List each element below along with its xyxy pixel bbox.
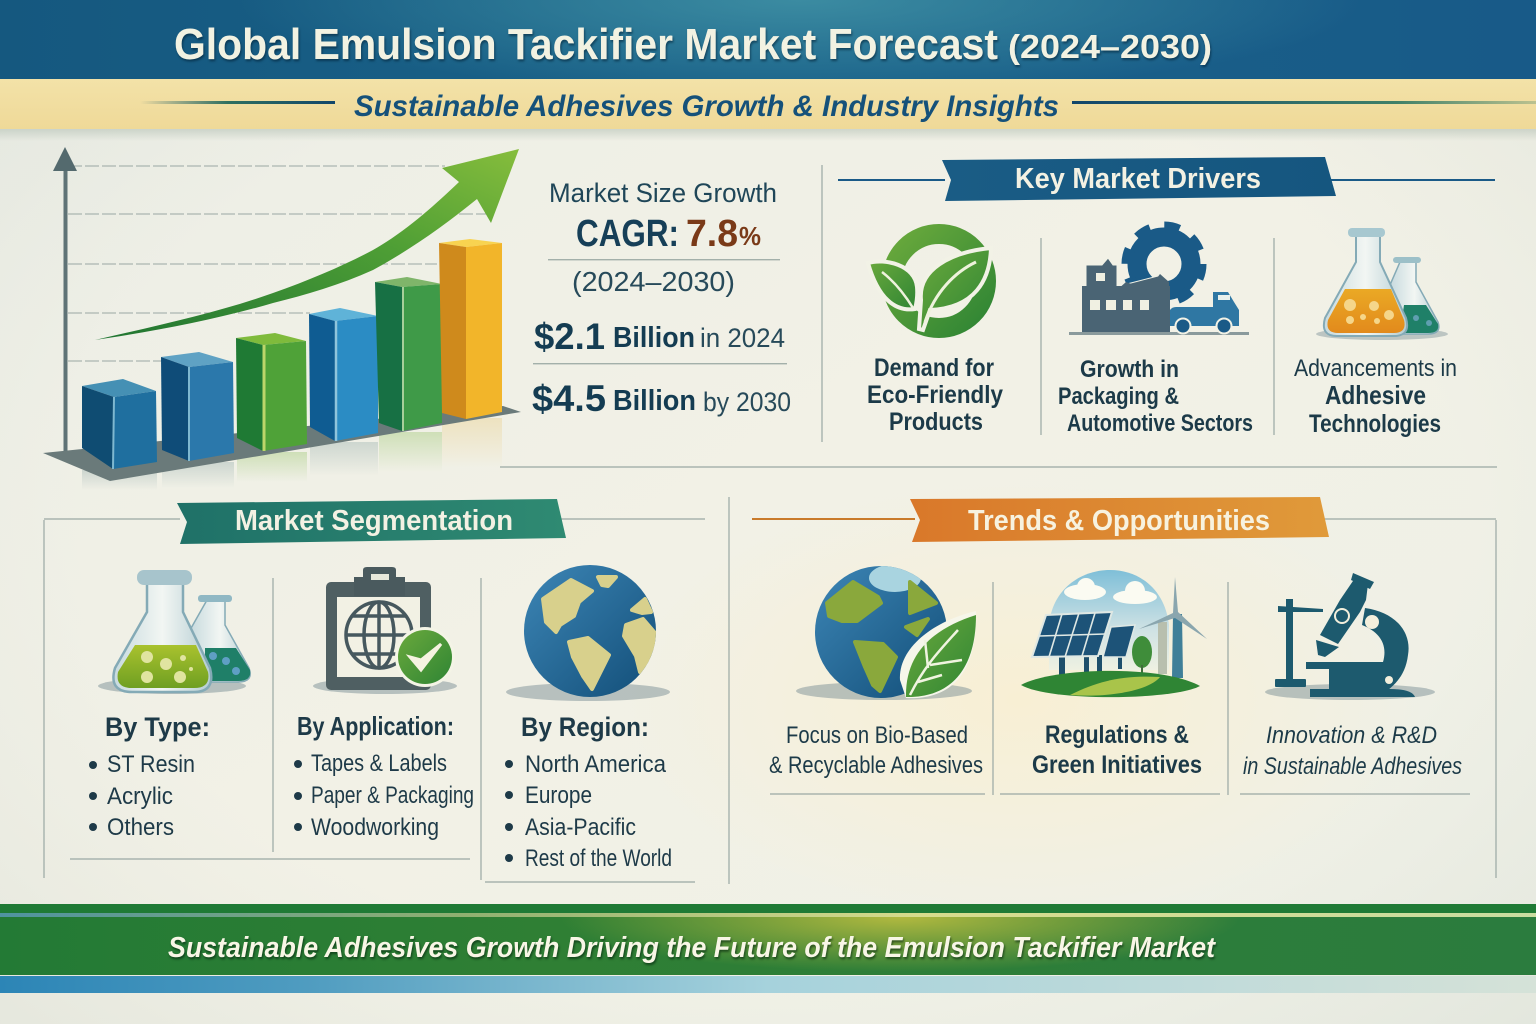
driver label 3: Adhesive [1325, 380, 1426, 410]
driver label 3 [1294, 355, 1457, 438]
by region list: Asia-Pacific [525, 814, 636, 841]
panel: market size stats: CAGR: [576, 213, 679, 255]
panel: market size stats: in 2024 [700, 323, 785, 353]
icon: factory, gear and truck [1069, 227, 1249, 335]
icon: leaves in circle [868, 234, 991, 330]
growth arrow [95, 149, 519, 340]
subtitle band: Sustainable Adhesives Growth & Industry Insights [354, 90, 1059, 123]
trend label 1 [769, 722, 983, 779]
icon: microscope [1265, 573, 1435, 700]
icon: globe [506, 565, 670, 701]
by region list: By Region: [521, 712, 649, 742]
by application list: By Application: [297, 711, 454, 741]
driver label 3: Technologies [1309, 410, 1441, 438]
heading: market segmentation [177, 499, 566, 544]
trend label 2: Regulations & [1045, 721, 1189, 749]
trend label 3: Innovation & R&D [1266, 722, 1437, 749]
driver label 1: Demand for [874, 354, 994, 382]
panel: market size stats: Billion [613, 385, 696, 417]
subtitle band [0, 79, 1536, 141]
driver label 2: Automotive Sectors [1067, 410, 1253, 437]
trend label 1: Focus on Bio-Based [786, 722, 968, 749]
heading: trends and opportunities: Trends & Opportunities [968, 505, 1270, 537]
heading: market segmentation: Market Segmentation [235, 505, 513, 537]
panel: market size stats: % [739, 221, 761, 251]
title: Global Emulsion Tackifier Market Forecast [174, 20, 998, 69]
bar 5 [375, 277, 442, 431]
chart reflections [82, 418, 502, 490]
chart floor [43, 406, 521, 481]
heading: key market drivers [838, 157, 1495, 201]
panel: market size stats: $2.1 [534, 316, 605, 357]
panel: market size stats [532, 178, 791, 419]
by type list: By Type: [105, 712, 210, 742]
bar 6 [439, 239, 502, 419]
bar 2 [161, 352, 234, 461]
driver label 3: Advancements in [1294, 355, 1457, 382]
driver label 1 [867, 354, 1003, 436]
icon: orange flask [1316, 228, 1448, 340]
trend label 2: Green Initiatives [1032, 751, 1202, 779]
panel: trends and opportunities [752, 497, 1462, 780]
driver label 2 [1058, 356, 1253, 437]
trend label 1: & Recyclable Adhesives [769, 752, 983, 779]
panel: market size stats: Billion [613, 322, 695, 354]
icon: solar panel and wind turbine [1021, 570, 1207, 697]
by type list: Others [107, 814, 174, 841]
trend label 3 [1243, 722, 1462, 780]
panel: market size stats: $4.5 [532, 378, 606, 419]
by region list: Europe [525, 782, 592, 809]
icon: globe with leaf [796, 564, 976, 700]
icon: clipboard with globe and check [313, 567, 457, 694]
trend label 2 [1032, 721, 1202, 779]
panel: market growth chart [43, 147, 521, 490]
by type list: ST Resin [107, 751, 195, 778]
by application list: Woodworking [311, 814, 439, 841]
panel: key market drivers [838, 157, 1495, 438]
by region list: Rest of the World [525, 845, 672, 872]
bar 1 [82, 379, 157, 469]
by application list: Tapes & Labels [311, 750, 447, 777]
header band [0, 0, 1536, 80]
icon: green flask [98, 570, 250, 694]
chart gridlines [68, 166, 490, 361]
heading: key market drivers: Key Market Drivers [1015, 163, 1261, 195]
trend label 3: in Sustainable Adhesives [1243, 753, 1462, 780]
title: (2024–2030) [1008, 28, 1212, 65]
by application list: Paper & Packaging [311, 782, 474, 809]
by type list [89, 712, 210, 841]
driver label 2: Packaging & [1058, 383, 1179, 410]
footer banner: Sustainable Adhesives Growth Driving the Future of the Emulsion Tackifier Market [168, 932, 1216, 964]
by region list [505, 712, 672, 872]
driver label 1: Eco-Friendly [867, 381, 1003, 409]
bar 4 [309, 308, 378, 441]
by type list: Acrylic [107, 783, 173, 810]
footer banner [0, 904, 1536, 993]
driver label 1: Products [889, 408, 983, 436]
by region list: North America [525, 751, 667, 778]
heading: trends and opportunities [752, 497, 1329, 542]
driver label 2: Growth in [1080, 356, 1179, 383]
chart axis [53, 147, 77, 454]
panel: market segmentation [89, 499, 672, 872]
by application list [294, 711, 474, 841]
panel: market size stats: Market Size Growth [549, 178, 777, 208]
panel: market size stats: by 2030 [703, 387, 791, 417]
panel: market size stats: (2024–2030) [572, 266, 735, 297]
panel: market size stats: 7.8 [686, 213, 738, 255]
bar 3 [236, 333, 307, 451]
